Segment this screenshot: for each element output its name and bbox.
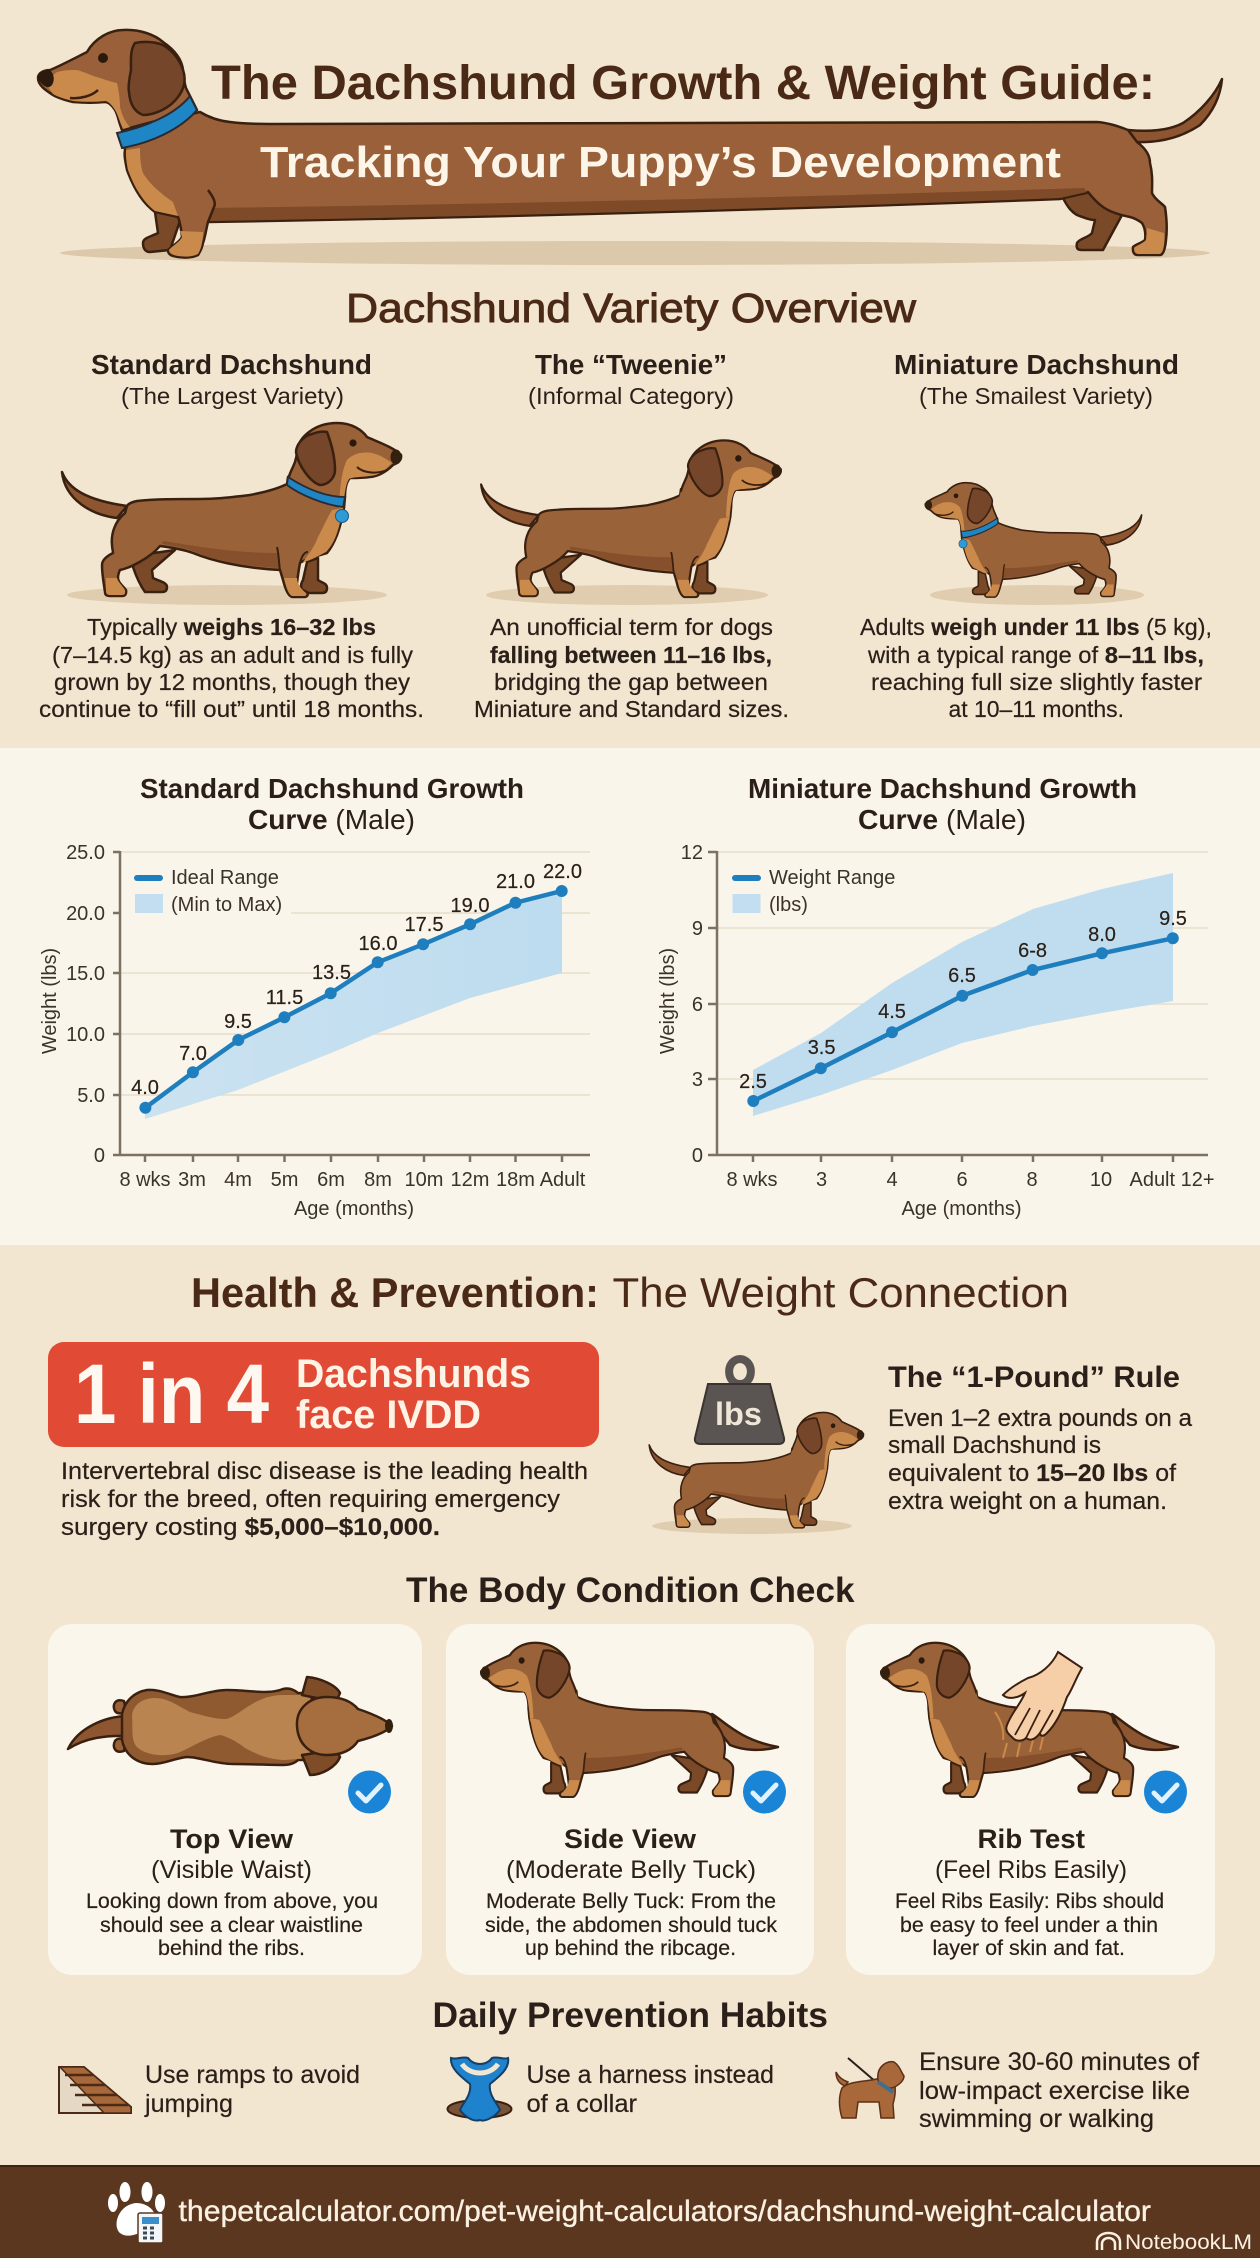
x axis labels: standard: 3m [178, 1169, 206, 1191]
heading: rib test: Rib Test [978, 1824, 1085, 1854]
habit: harness [448, 2057, 774, 2121]
y axis labels: standard: 15.0 [66, 963, 105, 985]
callout: 1 in 4 IVDD banner [48, 1342, 599, 1447]
chart title: standard: Standard Dachshund Growth [140, 773, 524, 804]
x axis title: miniature: Age (months) [901, 1198, 1022, 1220]
text: tweenie description: An unofficial term for dogs [490, 614, 773, 640]
panel: side view card [446, 1624, 814, 1975]
icon: walking dog on leash [836, 2058, 904, 2118]
data labels: miniature: 9.5 [1159, 908, 1187, 930]
callout: 1 in 4 IVDD banner: Dachshunds [296, 1352, 531, 1396]
text: top view [86, 1889, 378, 1960]
x axis labels: standard: 6m [317, 1169, 345, 1191]
y axis labels: standard [66, 842, 105, 1167]
data labels: standard: 21.0 [496, 871, 535, 893]
y axis title: standard: Weight (lbs) [39, 948, 61, 1054]
text: IVDD description: risk for the breed, often requiring emergency [61, 1486, 560, 1513]
text: top view: behind the ribs. [158, 1936, 305, 1960]
chart title: miniature: Curve (Male) [858, 804, 1025, 835]
text: harness [526, 2061, 774, 2118]
icon: header dog tail [1128, 79, 1222, 142]
text: top view: should see a clear waistline [100, 1913, 363, 1937]
x axis labels: standard: 8 wks [119, 1169, 171, 1191]
x axis labels: standard: 4m [224, 1169, 252, 1191]
text: standard description: continue to “fill out” until 18 months. [39, 696, 424, 722]
legend: miniature: Weight Range [769, 867, 895, 889]
icon: harness [448, 2057, 512, 2121]
heading: side view: Side View [564, 1824, 697, 1854]
legend: standard: (Min to Max) [171, 894, 282, 916]
y axis labels: miniature: 12 [681, 842, 703, 864]
chart title: miniature: Miniature Dachshund Growth [748, 773, 1137, 804]
text: miniature description: Adults weigh under 11 lbs (5 kg), [860, 614, 1212, 640]
text: IVDD description [61, 1458, 588, 1541]
data labels: miniature: 2.5 [739, 1071, 767, 1093]
x axis labels: standard: 12m [451, 1169, 489, 1191]
icon: ramp [59, 2067, 131, 2113]
x axis labels: standard: 10m [405, 1169, 443, 1191]
chart band: min to max range [145, 891, 562, 1119]
data labels: standard: 17.5 [405, 914, 443, 936]
text: tweenie description: falling between 11–16 lbs, [490, 642, 772, 668]
subheading: standard: (The Largest Variety) [121, 383, 344, 409]
text: tweenie description: bridging the gap between [494, 669, 768, 695]
heading: miniature: Miniature Dachshund [894, 349, 1179, 380]
text: standard description: Typically weighs 16–32 lbs [87, 614, 376, 640]
heading: tweenie: The “Tweenie” [535, 349, 727, 380]
text: exercise: swimming or walking [919, 2105, 1154, 2133]
y axis labels: miniature: 0 [692, 1145, 703, 1167]
subheading: tweenie: (Informal Category) [528, 383, 734, 409]
y axis labels: standard: 20.0 [66, 903, 105, 925]
icon: dog from above [68, 1677, 393, 1775]
text: IVDD description: surgery costing $5,000–$10,000. [61, 1514, 440, 1541]
text: standard description: grown by 12 months, though they [54, 669, 410, 695]
data labels: standard: 22.0 [543, 861, 582, 883]
icon: header dog collar [117, 96, 197, 148]
text: ramps: jumping [144, 2090, 233, 2118]
x axis labels: standard: 5m [271, 1169, 298, 1191]
x axis labels: miniature: 3 [816, 1169, 827, 1191]
notebooklm logo: NotebookLM [1125, 2231, 1252, 2254]
panel: miniature dachshund [860, 349, 1212, 722]
icon: header dog far legs [143, 190, 1122, 252]
legend: standard: Ideal Range [171, 867, 279, 889]
data labels: standard: 9.5 [224, 1011, 252, 1033]
text: side view: Moderate Belly Tuck: From the [486, 1889, 776, 1913]
callout: 1 in 4 IVDD banner: 1 in 4 [74, 1347, 269, 1441]
data labels: miniature: 4.5 [878, 1001, 906, 1023]
legend: miniature [732, 867, 895, 916]
text: tweenie description [474, 614, 789, 722]
text: rib test: layer of skin and fat. [932, 1936, 1125, 1960]
icon: header dog head [38, 30, 197, 130]
text: 1-pound rule: Even 1–2 extra pounds on a [888, 1405, 1193, 1432]
data labels: miniature: 6.5 [948, 965, 976, 987]
text: miniature description: at 10–11 months. [948, 696, 1124, 722]
icon: standard dog [62, 423, 402, 605]
text: 1-pound rule: extra weight on a human. [888, 1488, 1167, 1515]
text: harness: Use a harness instead [526, 2061, 774, 2089]
text: harness: of a collar [526, 2090, 637, 2118]
icon: paw with calculator [108, 2182, 165, 2243]
data labels: miniature: 6-8 [1018, 940, 1047, 962]
icon: check badge [348, 1770, 391, 1814]
heading: health and prevention: The Weight Connection [612, 1269, 1069, 1316]
text: exercise: Ensure 30-60 minutes of [919, 2048, 1199, 2076]
y axis labels: miniature: 6 [692, 994, 703, 1016]
heading: standard: Standard Dachshund [91, 349, 372, 380]
panel: 1-pound rule [888, 1361, 1193, 1515]
subheading: top view: (Visible Waist) [151, 1856, 312, 1884]
x axis labels: standard: 8m [364, 1169, 392, 1191]
subheading: miniature: (The Smailest Variety) [919, 383, 1153, 409]
legend: miniature: (lbs) [769, 894, 808, 916]
habit: ramps [59, 2061, 360, 2118]
text: exercise [919, 2048, 1199, 2133]
text: top view: Looking down from above, you [86, 1889, 378, 1913]
icon: header dog ear [129, 42, 185, 115]
data labels: miniature: 3.5 [808, 1037, 836, 1059]
text: side view: side, the abdomen should tuck [485, 1913, 777, 1937]
text: rib test: be easy to feel under a thin [900, 1913, 1158, 1937]
icon: header dog body [122, 112, 1167, 258]
x axis labels: miniature: 8 [1026, 1169, 1038, 1191]
chart title: standard: Curve (Male) [248, 804, 415, 835]
x axis title: standard: Age (months) [294, 1198, 414, 1220]
data labels: miniature: 8.0 [1088, 924, 1116, 946]
text: rib test [895, 1889, 1164, 1960]
y axis labels: standard: 10.0 [66, 1024, 105, 1046]
data labels: standard: 4.0 [131, 1077, 159, 1099]
chart line: ideal range [139, 885, 568, 1114]
y axis labels: miniature: 3 [692, 1069, 703, 1091]
text: tweenie description: Miniature and Standard sizes. [474, 696, 789, 722]
text: 1-pound rule [888, 1405, 1193, 1515]
chart: miniature growth curve [657, 773, 1214, 1220]
text: side view [485, 1889, 777, 1960]
heading: 1-pound rule: The “1-Pound” Rule [888, 1361, 1180, 1394]
data labels: standard: 19.0 [451, 895, 489, 917]
x axis labels: miniature: Adult 12+ [1130, 1169, 1214, 1191]
footer bar [0, 2165, 1260, 2258]
subtitle: Tracking Your Puppy’s Development [260, 138, 1061, 187]
icon: kettlebell weight on dog: lbs [715, 1396, 762, 1432]
header dog belly shade [209, 188, 1087, 221]
text: exercise: low-impact exercise like [919, 2077, 1190, 2105]
text: 1-pound rule: small Dachshund is [888, 1432, 1101, 1459]
x axis labels: miniature: 8 wks [726, 1169, 778, 1191]
chart line: weight range [747, 932, 1179, 1107]
icon: dog with hand on ribs [881, 1643, 1178, 1797]
y axis labels: standard: 0 [94, 1145, 105, 1167]
header: long dachshund banner [38, 30, 1222, 265]
x axis labels: miniature: 6 [956, 1169, 968, 1191]
x axis labels: miniature [726, 1169, 1214, 1191]
y axis labels: miniature [681, 842, 703, 1167]
chart: standard growth curve [39, 773, 590, 1220]
data labels: standard: 11.5 [266, 987, 303, 1009]
icon: check badge [1144, 1770, 1187, 1814]
panel: standard dachshund [39, 349, 424, 722]
title: The Dachshund Growth & Weight Guide: [211, 57, 1155, 110]
chart band: weight range [753, 873, 1173, 1116]
subheading: rib test: (Feel Ribs Easily) [935, 1856, 1127, 1884]
data labels: standard [131, 861, 582, 1099]
icon: tweenie dog [481, 440, 781, 605]
panel: rib test card [846, 1624, 1215, 1975]
x axis labels: standard: Adult [540, 1169, 586, 1191]
text: miniature description: with a typical range of 8–11 lbs, [867, 642, 1204, 668]
text: side view: up behind the ribcage. [525, 1936, 736, 1960]
data labels: standard: 13.5 [312, 962, 351, 984]
y axis title: miniature: Weight (lbs) [657, 948, 679, 1054]
text: ramps: Use ramps to avoid [145, 2061, 360, 2089]
heading: top view: Top View [170, 1824, 294, 1854]
y axis labels: standard: 5.0 [77, 1085, 105, 1107]
text: standard description [39, 614, 424, 722]
x axis labels: standard [119, 1169, 586, 1191]
text: rib test: Feel Ribs Easily: Ribs should [895, 1889, 1164, 1913]
subheading: side view: (Moderate Belly Tuck) [506, 1856, 756, 1884]
data labels: standard: 7.0 [179, 1043, 207, 1065]
y axis labels: miniature: 9 [692, 918, 703, 940]
text: miniature description: reaching full size slightly faster [871, 669, 1202, 695]
panel: tweenie [474, 349, 789, 722]
heading: body condition check: The Body Condition Check [406, 1571, 855, 1610]
text: miniature description [860, 614, 1212, 722]
panel: top view card [48, 1624, 422, 1975]
text: 1-pound rule: equivalent to 15–20 lbs of [888, 1460, 1176, 1487]
text: standard description: (7–14.5 kg) as an adult and is fully [52, 642, 413, 668]
x axis labels: standard: 18m [496, 1169, 535, 1191]
x axis labels: miniature: 10 [1090, 1169, 1112, 1191]
icon: miniature dog [925, 483, 1144, 605]
x axis labels: miniature: 4 [886, 1169, 898, 1191]
habit: exercise [836, 2048, 1199, 2133]
callout: 1 in 4 IVDD banner: face IVDD [296, 1393, 481, 1437]
y axis labels: standard: 25.0 [66, 842, 105, 864]
panel: growth charts band [0, 748, 1260, 1245]
heading: health and prevention: Health & Prevention: [191, 1269, 599, 1316]
text: IVDD description: Intervertebral disc disease is the leading health [61, 1458, 588, 1485]
icon: dog side view [481, 1643, 778, 1797]
text: ramps [144, 2061, 360, 2118]
legend: standard [135, 867, 282, 916]
heading: daily prevention habits: Daily Prevention Habits [432, 1996, 828, 2035]
data labels: miniature [739, 908, 1187, 1093]
data labels: standard: 16.0 [359, 933, 397, 955]
icon: kettlebell weight on dog [649, 1359, 864, 1534]
footer url: thepetcalculator.com/pet-weight-calculators/dachshund-weight-calculator [178, 2195, 1151, 2228]
icon: check badge [743, 1770, 786, 1814]
heading: variety overview: Dachshund Variety Overview [346, 285, 916, 331]
